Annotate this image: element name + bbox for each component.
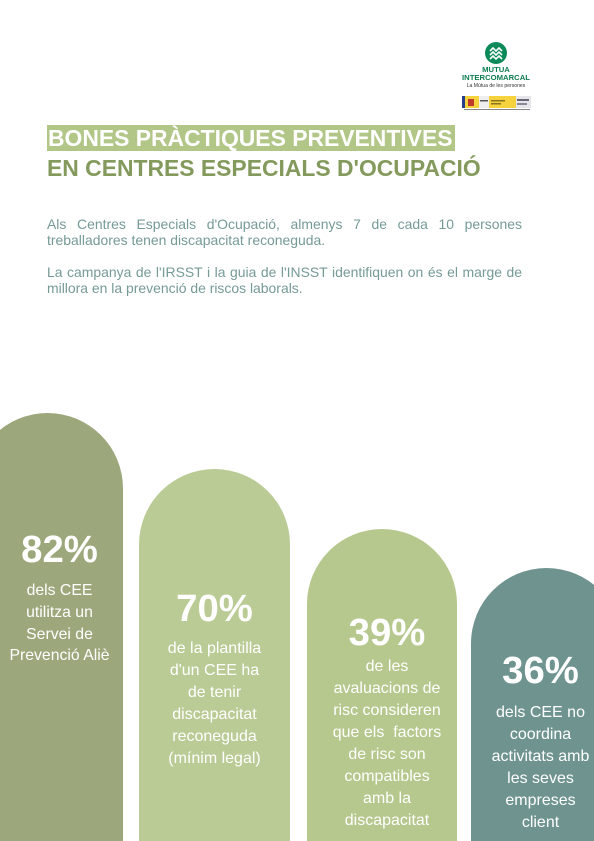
stat 70%: 70%	[176, 587, 253, 630]
text 70%: reconeguda	[172, 728, 257, 745]
title line 2: EN CENTRES ESPECIALS D'OCUPACIÓ	[47, 155, 481, 181]
text 36%: client	[522, 814, 559, 831]
text 36%: empreses	[505, 792, 576, 809]
logo: Mutua Intercomarcal	[462, 42, 531, 110]
text 36%: dels CEE no	[496, 704, 585, 721]
logo tagline: La Mútua de les persones	[467, 83, 525, 89]
text 39%: avaluacions de	[334, 680, 440, 697]
text 36%: les seves	[507, 770, 574, 787]
government funding strip	[462, 96, 531, 110]
title highlight line	[47, 125, 455, 151]
text 70%: (mínim legal)	[168, 750, 261, 767]
title	[47, 125, 481, 181]
logo name: MUTUA	[482, 65, 510, 74]
text 39%: de risc son	[348, 746, 426, 763]
intro paragraph 2	[47, 264, 522, 296]
intro paragraph 2: millora en la prevenció de riscos laborals.	[47, 280, 303, 296]
text 82%: dels CEE	[27, 582, 92, 599]
panel: 36%	[471, 568, 594, 841]
text 39%: discapacitat	[345, 812, 429, 829]
icon: logo circle	[485, 42, 507, 64]
text 70%: de tenir	[188, 684, 241, 701]
text 36%: coordina	[510, 726, 571, 743]
text 39%: compatibles	[344, 768, 430, 785]
stat 36%: 36%	[502, 649, 579, 692]
logo name: INTERCOMARCAL	[462, 73, 530, 82]
intro paragraph 1	[47, 216, 522, 248]
logo name	[462, 65, 530, 82]
text 70%	[168, 640, 262, 767]
text 39%	[333, 658, 441, 829]
text 82%: Prevenció Aliè	[9, 647, 110, 664]
text 39%: amb la	[363, 790, 411, 807]
stat 39%: 39%	[349, 611, 425, 654]
text 70%: discapacitat	[172, 706, 257, 723]
text 82%: Servei de	[26, 626, 93, 643]
text 82%	[9, 582, 110, 664]
panel: 82%	[0, 413, 123, 841]
panel: 39%	[307, 529, 457, 841]
intro paragraph 2: La campanya de l'IRSST i la guia de l'INSST identifiquen on és el marge de	[47, 264, 522, 280]
text 36%: activitats amb	[492, 748, 589, 765]
intro paragraph 1: treballadores tenen discapacitat reconeguda.	[47, 232, 325, 248]
text 70%: d'un CEE ha	[170, 662, 259, 679]
panel: 70%	[139, 469, 290, 841]
text 70%: de la plantilla	[168, 640, 261, 657]
text 82%: utilitza un	[26, 604, 93, 621]
text 36%	[492, 704, 589, 831]
title line 1: BONES PRÀCTIQUES PREVENTIVES	[48, 125, 452, 151]
intro paragraph 1: Als Centres Especials d'Ocupació, almenys 7 de cada 10 persones	[47, 216, 522, 232]
text 39%: risc consideren	[333, 702, 441, 719]
text 39%: que els factors	[333, 724, 441, 741]
text 39%: de les	[366, 658, 408, 675]
stat 82%: 82%	[21, 528, 98, 571]
